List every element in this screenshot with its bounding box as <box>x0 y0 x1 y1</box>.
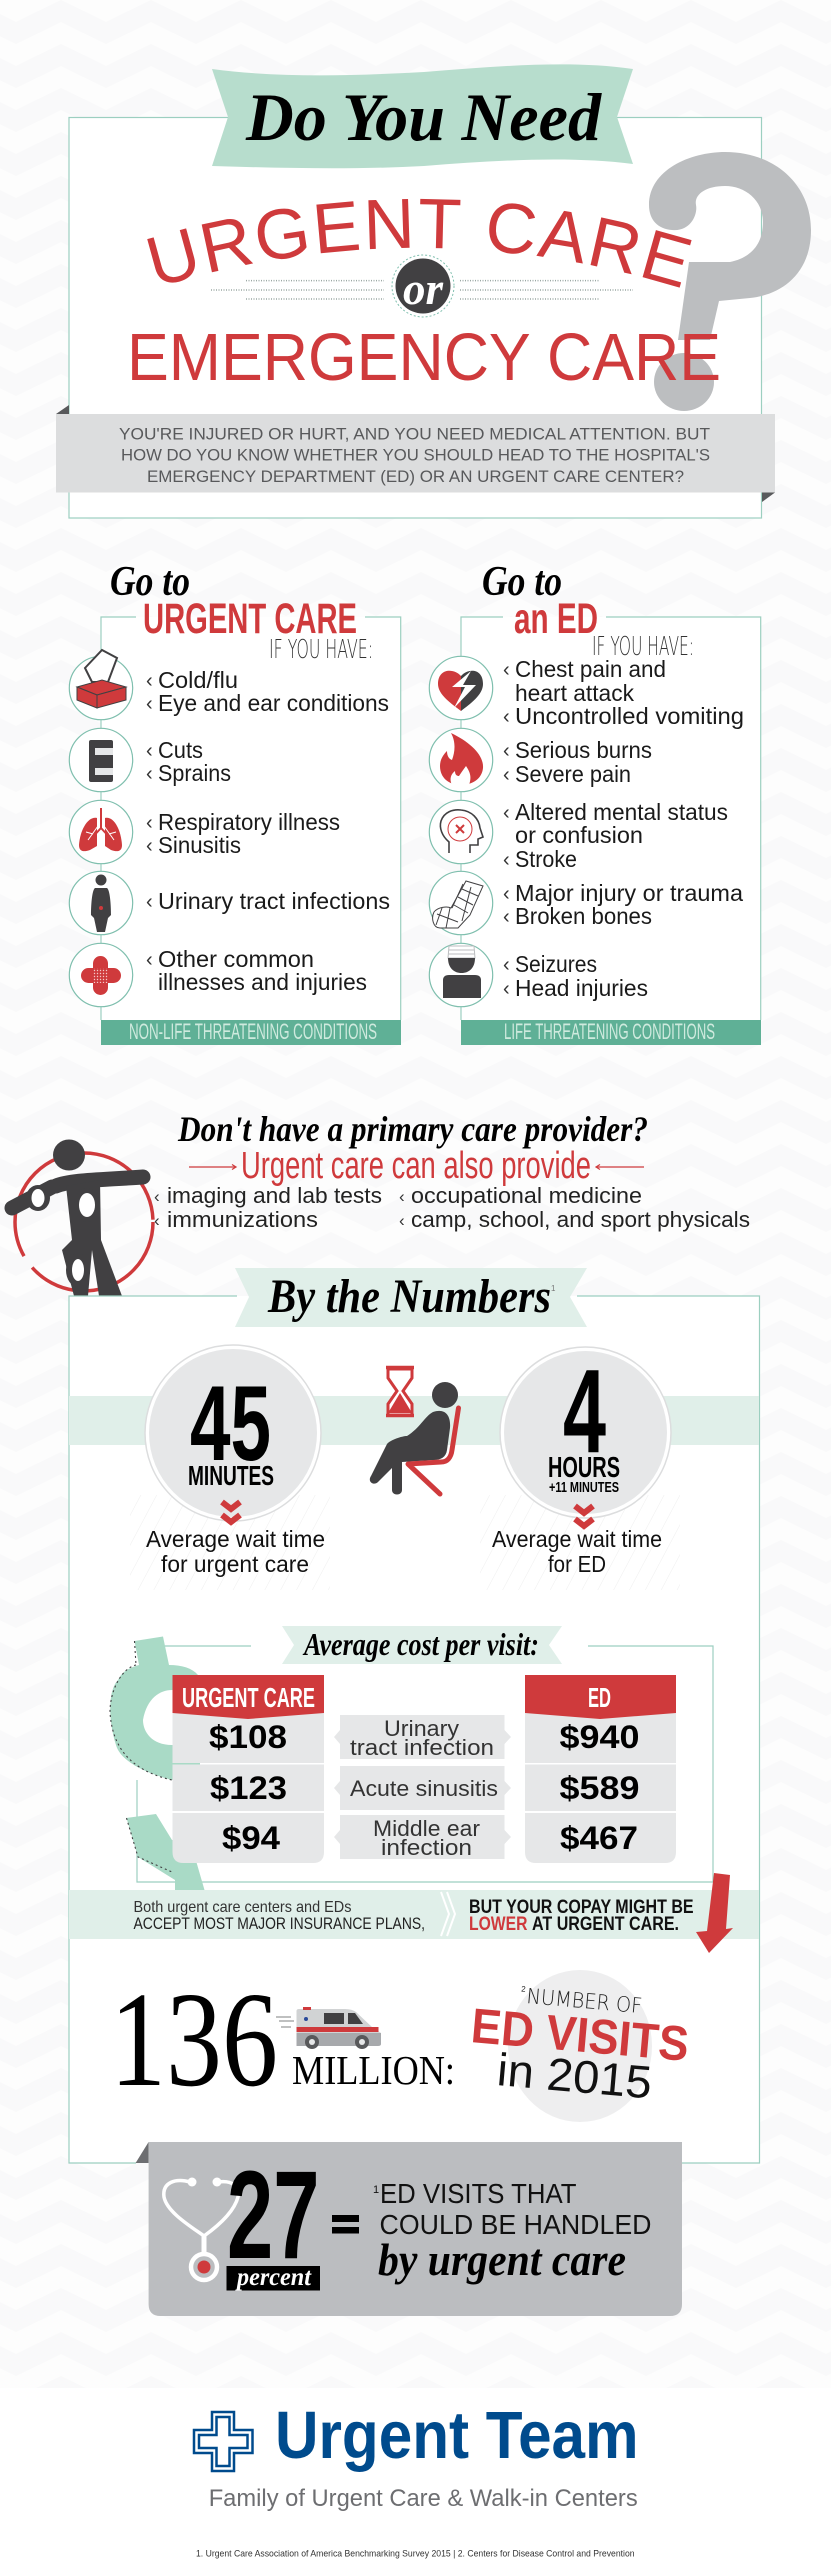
table column: condition labels: Acute sinusitis <box>350 1776 498 1801</box>
table column: urgent care prices: URGENT CARE <box>182 1682 315 1713</box>
list: urgent care conditions: ‹ <box>146 693 153 715</box>
list: ED conditions: Head injuries <box>515 975 648 1001</box>
list: ED conditions: ‹ <box>503 883 510 905</box>
callout: ED visits in 2015: 2 <box>521 1985 527 1994</box>
or divider <box>211 255 633 317</box>
callout: 27 percent <box>136 2142 682 2316</box>
section: primary care provider: ‹ <box>399 1211 405 1230</box>
list: urgent care conditions: Other common <box>158 946 314 972</box>
callout: ED visits in 2015 <box>469 1970 691 2122</box>
icon: dollar sign <box>110 1636 204 1890</box>
percent tag: percent <box>235 2264 312 2291</box>
list: ED conditions: Broken bones <box>515 903 652 929</box>
stat: 136 million: MILLION: <box>292 2047 455 2093</box>
list: urgent care conditions: Respiratory illness <box>158 809 340 835</box>
list: urgent care conditions: Urinary tract infections <box>158 888 390 914</box>
list: urgent care conditions: ‹ <box>146 740 153 762</box>
stat: 4 hours: HOURS <box>548 1452 620 1484</box>
insurance band: AT URGENT CARE. <box>532 1914 679 1935</box>
heading: emergency care: EMERGENCY CARE <box>127 320 721 395</box>
list: urgent care conditions: Eye and ear conditions <box>158 690 389 716</box>
list: urgent care conditions: ‹ <box>146 670 153 692</box>
callout: 27 percent: by urgent care <box>378 2234 626 2285</box>
stat: 4 hours: for ED <box>548 1551 606 1577</box>
insurance band <box>69 1890 759 1939</box>
insurance band: Both urgent care centers and EDs <box>134 1899 352 1916</box>
icon: cross <box>194 2412 252 2471</box>
footer bar <box>461 1019 761 1045</box>
icon: bandage roll <box>89 740 113 782</box>
callout: ED visits in 2015: NUMBER OF <box>526 1984 643 2018</box>
table column: ED prices: $589 <box>560 1770 640 1806</box>
section: primary care provider: occupational medicine <box>411 1183 642 1208</box>
list: ED conditions: ‹ <box>503 849 510 871</box>
icon: ambulance <box>276 2007 381 2049</box>
table column: condition labels: infection <box>381 1835 472 1860</box>
section: primary care provider: ‹ <box>154 1211 160 1230</box>
arrow: down <box>696 1873 733 1953</box>
callout: 27 percent: COULD BE HANDLED <box>380 2209 652 2240</box>
list: ED conditions: Stroke <box>515 846 577 872</box>
heading: Go to <box>110 559 190 605</box>
footer bar: NON-LIFE THREATENING CONDITIONS <box>129 1019 377 1044</box>
list: ED conditions: ‹ <box>503 740 510 762</box>
list: ED conditions: Seizures <box>515 951 597 977</box>
callout: 27 percent: 1 <box>373 2184 379 2196</box>
list: urgent care conditions: ‹ <box>146 891 153 913</box>
list: ED conditions: ‹ <box>503 906 510 928</box>
heading: IF YOU HAVE: <box>269 635 373 665</box>
icon circles <box>429 656 493 1007</box>
or divider: or <box>403 263 444 314</box>
heading: URGENT CARE <box>143 595 357 643</box>
table column: condition labels: tract infection <box>350 1735 494 1760</box>
callout: ED visits in 2015: ED VISITS <box>469 1999 691 2072</box>
list: ED conditions: ‹ <box>503 954 510 976</box>
list: ED conditions: ‹ <box>503 978 510 1000</box>
section: primary care provider: immunizations <box>167 1207 318 1232</box>
icon: head injury <box>443 946 481 998</box>
list: ED conditions: ‹ <box>503 802 510 824</box>
ribbon: average cost per visit: Average cost per visit: <box>302 1626 539 1662</box>
list: urgent care conditions: Cuts <box>158 737 203 763</box>
panel: average cost frame <box>137 1646 713 1882</box>
table column: ED prices: ED <box>588 1682 611 1713</box>
icon: seated person and hourglass <box>370 1368 458 1494</box>
panel: by the numbers frame <box>69 1296 760 2163</box>
stat: 45 minutes: MINUTES <box>188 1460 274 1491</box>
intro band: EMERGENCY DEPARTMENT (ED) OR AN URGENT CARE CENTER? <box>147 468 684 486</box>
stat: 4 hours: +11 MINUTES <box>549 1479 619 1496</box>
section: primary care provider: ‹ <box>154 1187 160 1206</box>
icon circles <box>69 656 133 1007</box>
list: ED conditions: ‹ <box>503 706 510 728</box>
table column: urgent care prices: $123 <box>210 1770 287 1806</box>
section: primary care provider: ‹ <box>399 1187 405 1206</box>
table column: condition labels: Middle ear <box>373 1816 480 1841</box>
stat: 45 minutes <box>145 1345 325 1577</box>
list: ED conditions: Serious burns <box>515 737 652 763</box>
list: urgent care conditions: Sprains <box>158 760 231 786</box>
icon: head with x <box>440 810 483 853</box>
table column: ED prices: $467 <box>560 1820 638 1856</box>
list: urgent care conditions: Cold/flu <box>158 667 238 693</box>
callout: 27 percent: 27 <box>227 2146 320 2285</box>
footer bar <box>101 1019 401 1045</box>
section: primary care provider: Don't have a primary care provider? <box>177 1109 648 1149</box>
icon: stretching figure <box>12 1140 153 1296</box>
intro band: YOU'RE INJURED OR HURT, AND YOU NEED MEDICAL ATTENTION. BUT <box>119 426 710 444</box>
stat: 4 hours <box>492 1345 671 1577</box>
list: ED conditions: Severe pain <box>515 761 631 787</box>
arrows <box>189 1164 644 1170</box>
panel: go to an ED <box>429 559 761 1045</box>
list: ED conditions <box>503 656 744 1001</box>
list: urgent care conditions: ‹ <box>146 949 153 971</box>
stat: 4 hours: Average wait time <box>492 1526 662 1552</box>
callout: ED visits in 2015: in 2015 <box>495 2043 654 2108</box>
table column: condition labels <box>334 1715 511 1860</box>
insurance band: ACCEPT MOST MAJOR INSURANCE PLANS, <box>134 1915 425 1933</box>
stat: 45 minutes: 45 <box>190 1363 271 1483</box>
panel: go to urgent care <box>69 559 401 1045</box>
table column: ED prices <box>525 1675 676 1863</box>
list: ED conditions: Altered mental status <box>515 799 728 825</box>
table column: condition labels: Urinary <box>384 1716 459 1741</box>
icon: big question mark <box>649 152 811 411</box>
table column: urgent care prices <box>172 1675 324 1863</box>
heading: an ED <box>514 595 598 643</box>
list: ED conditions: or confusion <box>515 822 643 848</box>
list: urgent care conditions: ‹ <box>146 835 153 857</box>
icon: adhesive bandage <box>81 956 121 995</box>
table column: ED prices: $940 <box>560 1719 640 1755</box>
stat: 45 minutes: Average wait time <box>146 1526 325 1552</box>
list: ED conditions: heart attack <box>515 680 634 706</box>
list: ED conditions: Chest pain and <box>515 656 666 682</box>
icon: broken heart <box>438 671 483 711</box>
logo: urgent team <box>194 2398 639 2512</box>
icon: lungs <box>79 808 122 851</box>
list: ED conditions: ‹ <box>503 764 510 786</box>
hourglass <box>386 1368 414 1416</box>
icon: flame <box>440 733 483 785</box>
logo: urgent team: Urgent Team <box>275 2398 639 2473</box>
ribbon: by the numbers: By the Numbers <box>267 1270 551 1323</box>
heading <box>110 559 373 665</box>
insurance band: BUT YOUR COPAY MIGHT BE <box>469 1897 694 1918</box>
panel: header frame <box>69 118 762 518</box>
wait time band <box>69 1396 759 1590</box>
icon: stethoscope <box>164 2178 238 2280</box>
icon: tissue box <box>77 650 126 708</box>
list: urgent care conditions: illnesses and injuries <box>158 969 367 995</box>
heading: IF YOU HAVE: <box>592 632 694 662</box>
stat: 4 hours: 4 <box>563 1345 606 1478</box>
section: primary care provider: imaging and lab tests <box>167 1183 382 1208</box>
icon: leg cast <box>433 881 483 928</box>
title banner <box>212 64 633 168</box>
heading: Go to <box>482 559 562 605</box>
list: ED conditions: Uncontrolled vomiting <box>515 703 744 729</box>
ribbon: by the numbers: 1 <box>551 1284 556 1293</box>
icon: person urinary <box>91 874 111 932</box>
stat: 45 minutes: for urgent care <box>161 1551 309 1577</box>
list: urgent care conditions <box>146 667 390 995</box>
title banner: Do You Need <box>245 79 602 155</box>
list: ED conditions: Major injury or trauma <box>515 880 743 906</box>
footnote: 1. Urgent Care Association of America Benchmarking Survey 2015 | 2. Centers for Disease Control and Prevention <box>196 2548 635 2560</box>
list: urgent care conditions: ‹ <box>146 812 153 834</box>
heading <box>482 559 694 662</box>
heading: urgent care arc: URGENT CARE <box>147 198 692 288</box>
table column: urgent care prices: $108 <box>209 1719 287 1755</box>
insurance band: LOWER <box>469 1914 528 1935</box>
intro band <box>56 405 775 502</box>
table column: urgent care prices: $94 <box>222 1820 280 1856</box>
logo: urgent team: Family of Urgent Care & Walk-in Centers <box>209 2485 638 2512</box>
intro band: HOW DO YOU KNOW WHETHER YOU SHOULD HEAD TO THE HOSPITAL'S <box>121 446 710 464</box>
section: primary care provider: camp, school, and sport physicals <box>411 1207 750 1232</box>
section: primary care provider: Urgent care can also provide <box>241 1145 591 1187</box>
section: primary care provider <box>154 1109 750 1232</box>
list: urgent care conditions: ‹ <box>146 763 153 785</box>
list: ED conditions: ‹ <box>503 659 510 681</box>
callout: 27 percent: ED VISITS THAT <box>380 2178 576 2209</box>
list: urgent care conditions: Sinusitis <box>158 832 241 858</box>
stat: 136 million <box>110 1965 455 2115</box>
stat: 136 million: 136 <box>110 1965 278 2115</box>
